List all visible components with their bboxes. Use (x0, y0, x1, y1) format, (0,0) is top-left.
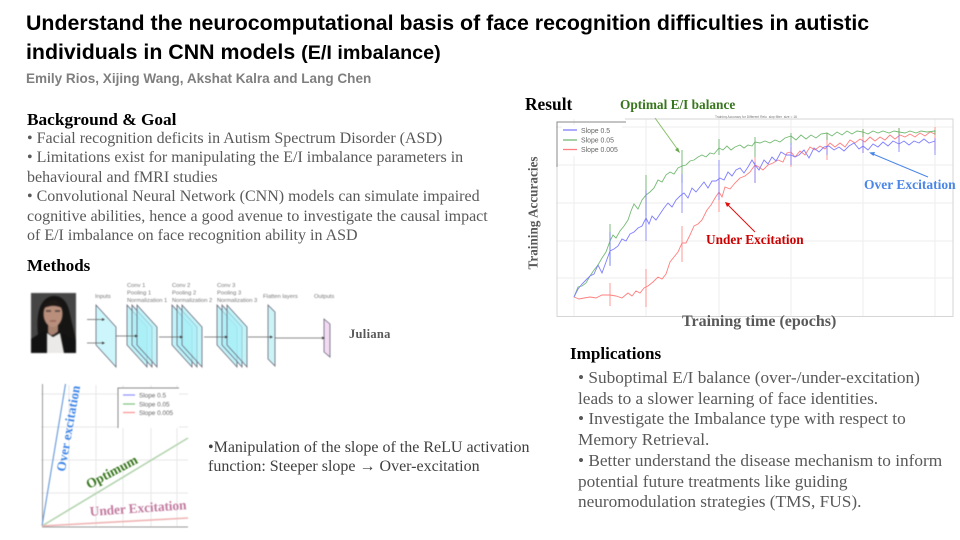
y axis label: Training Accuracies (526, 157, 540, 269)
text: background bullets: • Facial recognition deficits in Autism Spectrum Disorder (ASD) (27, 130, 442, 146)
arrow: under excitation (725, 202, 755, 232)
layers: conv 3 (217, 305, 247, 367)
text: implications bullets: Memory Retrieval. (578, 430, 709, 449)
label: inputs: Inputs (95, 294, 111, 300)
arrow: over excitation (869, 152, 928, 177)
label: conv 1: Conv 1 (127, 283, 145, 289)
label: under excitation: Under Excitation (706, 232, 804, 247)
text: implications bullets: • Better understand the disease mechanism to inform (578, 451, 942, 470)
line: over excitation slope (42, 384, 66, 526)
text: implications bullets: neuromodulation strategies (TMS, FUS). (578, 492, 861, 511)
text: background bullets: cognitive abilities, hence a good avenue to investigate the causal impact (27, 208, 488, 224)
label: conv 3: Normalization 3 (217, 298, 257, 304)
heading: background and goal: Background & Goal (27, 110, 176, 129)
title: individuals in CNN models (E/I imbalance) (26, 40, 441, 64)
label: outputs: Outputs (314, 294, 334, 300)
text: implications bullets: potential future treatments like guiding (578, 472, 847, 491)
title (26, 11, 869, 64)
x axis label: Training time (epochs) (682, 313, 836, 330)
authors: Emily Rios, Xijing Wang, Akshat Kalra and Lang Chen (26, 71, 371, 86)
text: activation function manipulation (208, 438, 530, 475)
text: background bullets: of E/I imbalance on face recognition ability in ASD (27, 227, 358, 244)
label: output name: Juliana (349, 327, 391, 341)
arrow: optimal balance (655, 118, 680, 153)
label: flatten layers: Flatten layers (263, 294, 298, 300)
text: implications bullets: • Suboptimal E/I balance (over-/under-excitation) (578, 368, 920, 387)
label: conv 2: Conv 2 (172, 283, 190, 289)
heading: result: Result (525, 94, 572, 114)
arrows: network flow (87, 318, 325, 344)
text: implications bullets (578, 368, 942, 511)
text: background bullets (27, 130, 488, 244)
title: Understand the neurocomputational basis of face recognition difficulties in autistic (26, 11, 869, 35)
text: background bullets: • Limitations exist for manipulating the E/I imbalance parameters in (27, 149, 463, 166)
label: under excitation: Under Excitation (89, 497, 187, 519)
icon: face photo (30, 292, 77, 354)
label: over excitation: Over excitation (53, 383, 83, 473)
label: conv 3: Conv 3 (217, 283, 235, 289)
text: activation function manipulation: •Manipulation of the slope of the ReLU activation (208, 438, 530, 456)
label: conv 1: Normalization 1 (127, 298, 167, 304)
frame and grid (556, 119, 953, 316)
label: over excitation: Over Excitation (864, 177, 956, 192)
grid (41, 385, 188, 527)
label: conv 2: Normalization 2 (172, 298, 212, 304)
text: implications bullets: leads to a slower learning of face identities. (578, 389, 878, 408)
legend: Slope 0.5 (581, 128, 610, 135)
line: under excitation slope (42, 518, 188, 526)
text: implications bullets: • Investigate the Imbalance type with respect to (578, 409, 906, 428)
layer: flatten (268, 305, 275, 366)
heading: implications: Implications (570, 344, 661, 363)
legend (557, 122, 626, 167)
label: optimal balance: Optimal E/I balance (620, 97, 735, 112)
heading: methods: Methods (27, 256, 90, 275)
text: background bullets: • Convolutional Neural Network (CNN) models can simulate impaired (27, 188, 480, 205)
legend: Slope 0.05 (581, 138, 614, 144)
layers: conv 1 (127, 305, 157, 367)
label: conv 1: Pooling 1 (127, 290, 151, 296)
legend (118, 388, 179, 428)
legend: Slope 0.5 (139, 392, 166, 400)
text: activation function manipulation: function: Steeper slope → Over-excitation (208, 458, 480, 475)
text: background bullets: behavioural and fMRI studies (27, 168, 218, 186)
chart title: Training Accuracy for Different Relu_slop filter_size = 16 (715, 115, 797, 119)
line: optimum slope (42, 438, 188, 526)
layer: output (324, 319, 330, 357)
label: conv 2: Pooling 2 (172, 290, 196, 296)
axes (42, 384, 188, 527)
series: slope 0.05 green (574, 128, 935, 297)
legend: Slope 0.005 (139, 410, 174, 417)
label: optimum: Optimum (83, 452, 141, 492)
layer: input (96, 305, 116, 367)
label: conv 3: Pooling 3 (217, 290, 241, 296)
legend: Slope 0.05 (139, 402, 170, 408)
legend: Slope 0.005 (581, 147, 618, 154)
series: slope 0.5 blue (574, 135, 935, 297)
series: slope 0.005 red (574, 127, 935, 307)
layers: conv 2 (172, 305, 202, 367)
